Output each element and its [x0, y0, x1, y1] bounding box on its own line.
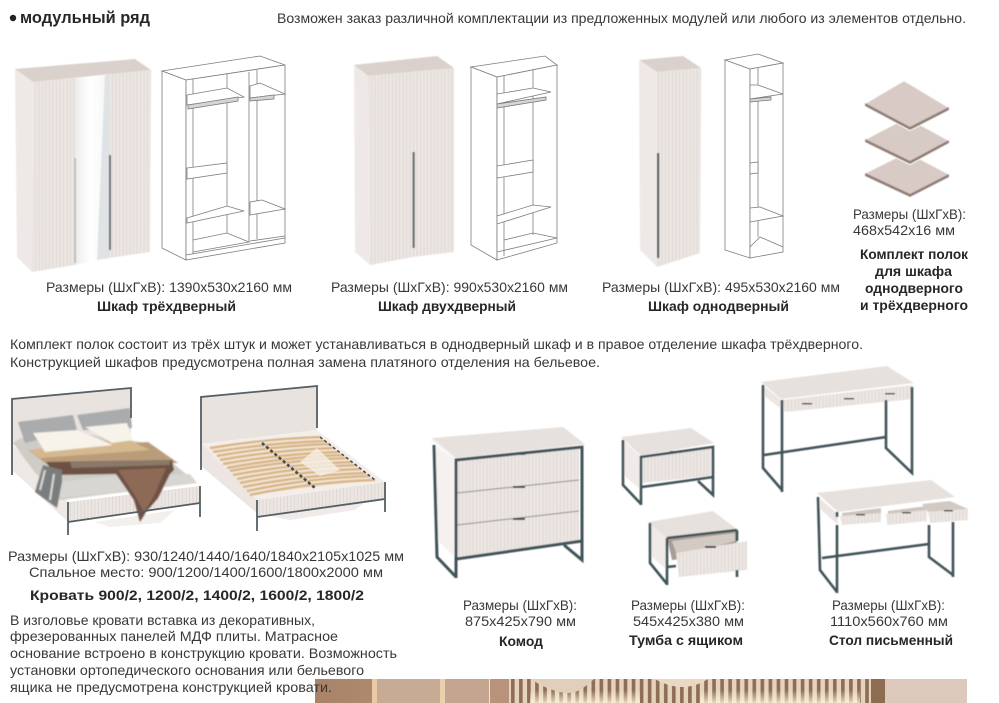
product name: Шкаф трёхдверный	[97, 298, 236, 314]
bed with bedding	[12, 388, 200, 535]
dimensions: 545х425х380 мм	[633, 613, 744, 629]
dimensions: Размеры (ШхГхВ): 495х530х2160 мм	[602, 279, 840, 295]
bedside table closed	[621, 428, 714, 505]
bedside table open	[648, 511, 747, 585]
intro text: Возможен заказ различной комплектации из предложенных модулей или любого из элементов отдельно.	[277, 10, 966, 26]
product name: Комплект полок	[860, 246, 969, 262]
shelf icons	[865, 80, 949, 197]
shelf set note: Комплект полок состоит из трёх штук и может устанавливаться в однодверный шкаф и в правое отделение шкафа трёхдверного.	[10, 336, 863, 352]
bed description: ящика не предусмотрена конструкцией кровати.	[10, 679, 332, 695]
dimensions: Размеры (ШхГхВ):	[832, 597, 945, 613]
dimensions: Размеры (ШхГхВ): 990х530х2160 мм	[331, 279, 568, 295]
dimensions	[463, 597, 577, 629]
product name: для шкафа	[875, 263, 952, 279]
dresser drawing	[432, 427, 585, 578]
bed description	[10, 612, 397, 695]
photo strip: interior	[315, 679, 967, 703]
dimensions: 468х542х16 мм	[853, 222, 955, 238]
dimensions	[8, 548, 404, 580]
panel: dresser	[432, 427, 585, 649]
panel: three-door wardrobe	[15, 56, 292, 314]
product name	[860, 246, 969, 313]
wardrobe line drawing: one door	[725, 54, 783, 258]
wardrobe render: three doors	[15, 59, 151, 272]
panel: beds	[8, 386, 404, 695]
dimensions: Размеры (ШхГхВ):	[853, 206, 966, 222]
product name: однодверного	[865, 280, 963, 296]
title: модульный ряд	[20, 8, 150, 27]
bed description: основание встроено в конструкцию кровати. Возможность	[10, 645, 397, 661]
desk with open drawers	[817, 480, 968, 593]
product name: Шкаф однодверный	[648, 298, 789, 314]
wardrobe line drawing: two doors	[471, 56, 557, 260]
dimensions: 1110х560х760 мм	[830, 613, 948, 629]
shelf set note: Конструкцией шкафов предусмотрена полная замена платяного отделения на бельевое.	[10, 354, 600, 370]
panel: two-door wardrobe	[331, 56, 568, 314]
product name: Стол письменный	[829, 632, 953, 648]
product name: Кровать 900/2, 1200/2, 1400/2, 1600/2, 1800/2	[30, 587, 364, 603]
dimensions: 875х425х790 мм	[465, 613, 576, 629]
panel: bedside tables	[621, 428, 747, 648]
desk closed	[761, 366, 914, 492]
dimensions: Размеры (ШхГхВ):	[631, 597, 745, 613]
panel: shelf set	[853, 80, 969, 313]
dimensions	[853, 206, 966, 238]
wardrobe render: two doors	[354, 56, 454, 265]
wardrobe render: one door	[639, 56, 701, 267]
shelf set note	[10, 336, 863, 370]
dimensions	[830, 597, 948, 629]
dimensions: Размеры (ШхГхВ):	[463, 597, 577, 613]
bed description: установки ортопедического основания или бельевого	[10, 662, 364, 678]
bed description: фрезерованных панелей МДФ плиты. Матрасное	[10, 628, 338, 644]
panel: writing desk	[761, 366, 968, 648]
dimensions: Размеры (ШхГхВ): 1390х530х2160 мм	[46, 279, 292, 295]
bed description: В изголовье кровати вставка из декоративных,	[10, 612, 315, 628]
panel: one-door wardrobe	[602, 54, 840, 314]
product name: Шкаф двухдверный	[378, 298, 516, 314]
dimensions: Спальное место: 900/1200/1400/1600/1800х2000 мм	[29, 564, 383, 580]
product name: Тумба с ящиком	[629, 632, 743, 648]
wardrobe line drawing: three doors	[162, 56, 285, 260]
product name: Комод	[499, 633, 543, 649]
dimensions	[631, 597, 745, 629]
bed with slatted base	[201, 386, 385, 531]
dimensions: Размеры (ШхГхВ): 930/1240/1440/1640/1840х2105х1025 мм	[8, 548, 404, 564]
product name: и трёхдверного	[860, 297, 968, 313]
